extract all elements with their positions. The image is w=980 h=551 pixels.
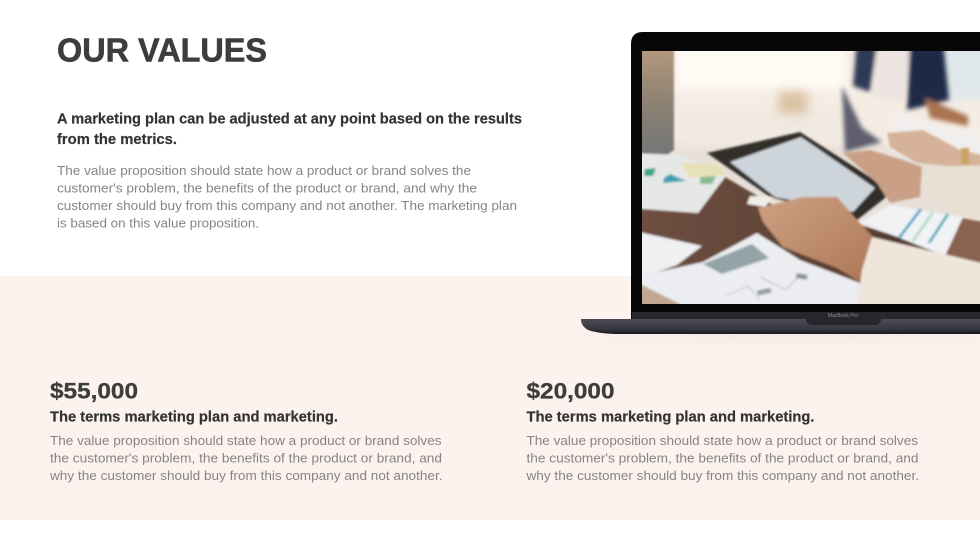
laptop notch [806,319,881,325]
intro paragraph: customer should buy from this company and not another. The marketing plan [57,198,517,213]
photo on screen [642,51,980,304]
column body: why the customer should buy from this company and not another. [49,468,442,483]
column heading: The terms marketing plan and marketing. [50,408,338,426]
left dark object [642,51,676,156]
background band [0,276,980,520]
front sleeve [857,236,980,304]
right hand [843,150,922,203]
column heading: The terms marketing plan and marketing. [526,408,814,426]
subheading [57,110,522,148]
laptop base [581,319,980,334]
blurred colleague [842,40,968,152]
column body: The value proposition should state how a product or brand solves [50,433,442,448]
right sleeve [954,164,980,170]
column body: the customer's problem, the benefits of the product or brand, and [526,450,918,466]
laptop shadow [575,333,980,341]
amount: $20,000 [526,378,614,404]
intro paragraph: customer's problem, the benefits of the product or brand, and why the [57,180,477,196]
laptop mockup [575,30,980,341]
column body: the customer's problem, the benefits of the product or brand, and [50,450,442,466]
paper bottom left [642,230,703,277]
top hand [887,130,980,170]
paper with chart left [630,153,725,213]
column body: why the customer should buy from this company and not another. [525,468,919,483]
left column [49,378,442,483]
paper with stripes right [860,205,963,256]
column body [525,433,919,483]
column body: The value proposition should state how a product or brand solves [526,433,918,448]
intro paragraph [57,163,517,230]
right column [525,378,919,483]
amount: $55,000 [50,378,138,404]
laptop chin [632,312,980,319]
column body [49,433,442,483]
laptop label: MacBook Pro [828,313,858,319]
subheading: A marketing plan can be adjusted at any point based on the results [57,110,522,128]
subheading: from the metrics. [57,131,177,148]
title: OUR VALUES [57,32,267,68]
table [642,176,934,284]
intro paragraph: The value proposition should state how a product or brand solves the [57,163,471,178]
tablet [707,132,887,220]
laptop lid [631,32,980,319]
intro paragraph: is based on this value proposition. [57,216,259,230]
front hand [758,197,873,282]
